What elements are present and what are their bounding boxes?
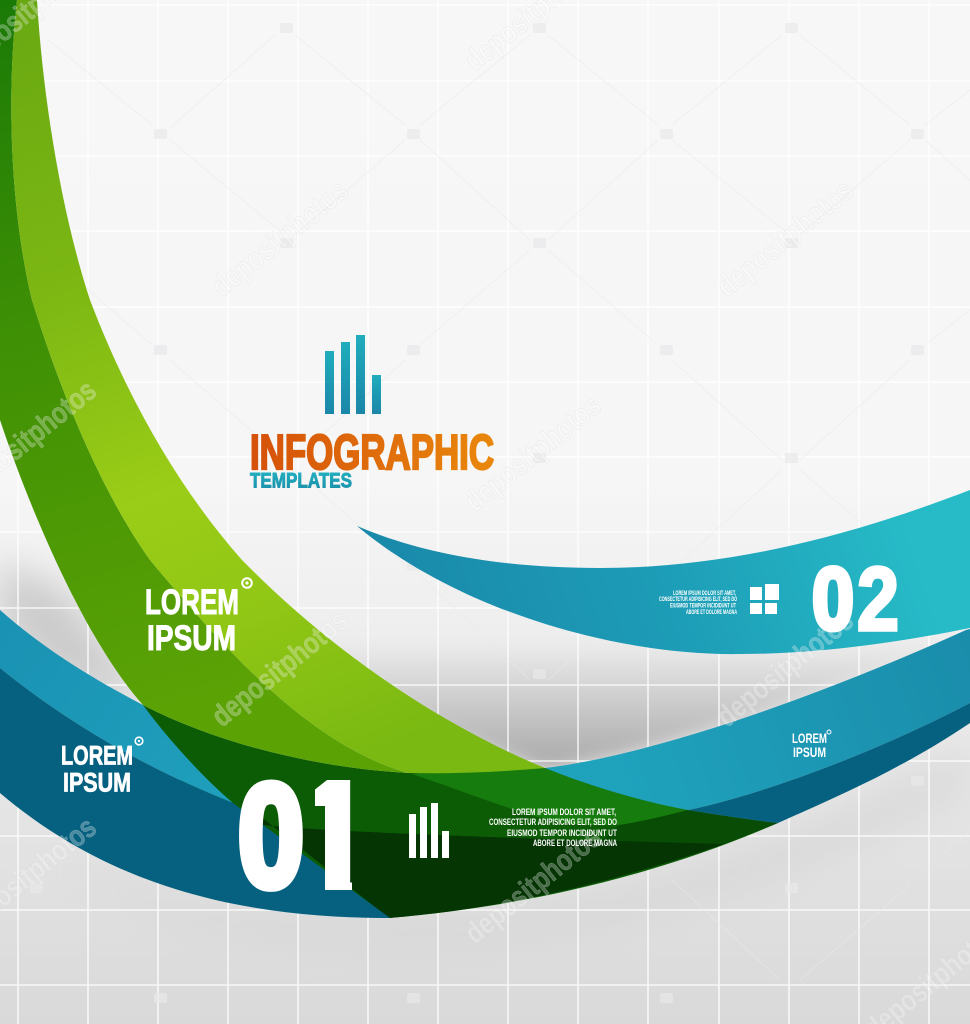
label: small lorem ipsum on teal band xyxy=(792,730,831,760)
label: lorem ipsum on green band: IPSUM xyxy=(147,619,236,658)
title: infographic templates: TEMPLATES xyxy=(250,470,352,492)
watermark: repeated stock-photo marks: depositphotos xyxy=(206,174,355,303)
text block: paragraph 01: ABORE ET DOLORE MAGNA xyxy=(533,838,617,849)
band: dark green base xyxy=(140,705,778,918)
band: left light teal xyxy=(0,610,233,803)
number: 01: 0 xyxy=(238,754,304,917)
label: small lorem ipsum on teal band: LOREM xyxy=(792,730,827,746)
label: lorem ipsum on green band: LOREM xyxy=(145,583,239,622)
band: lower right teal xyxy=(545,629,970,810)
watermark: repeated stock-photo marks: depositphotos xyxy=(711,604,860,733)
watermark: repeated stock-photo marks: depositphotos xyxy=(206,604,355,733)
label: lorem ipsum on blue band: IPSUM xyxy=(63,768,131,798)
band: mid green xyxy=(0,0,408,773)
number: 01: 1 xyxy=(294,746,374,942)
text block: paragraph 01: EIUSMOD TEMPOR INCIDIDUNT UT xyxy=(507,828,617,839)
band: upper teal ribbon xyxy=(357,490,970,654)
text block: paragraph 02: EIUSMOD TEMPOR INCIDIDUNT UT xyxy=(670,604,736,610)
icon: white bar chart xyxy=(409,803,449,858)
band: darkest green xyxy=(240,800,724,918)
text block: paragraph 01: LOREM IPSUM DOLOR SIT AMET, xyxy=(512,807,616,818)
band: bright green xyxy=(11,0,545,773)
band: left dark blue xyxy=(0,668,390,918)
icon: teal bar chart xyxy=(325,335,381,414)
watermark: repeated stock-photo marks: depositphotos xyxy=(459,389,608,518)
text block: paragraph 01: CONSECTETUR ADIPISICING ELIT, SED DO xyxy=(489,817,617,828)
watermark: repeated stock-photo marks: depositphotos xyxy=(711,174,860,303)
title: infographic templates: INFOGRAPHIC xyxy=(250,426,494,480)
text block: paragraph 02: LOREM IPSUM DOLOR SIT AMET, xyxy=(673,591,736,597)
text block: paragraph 02: CONSECTETUR ADIPISICING ELIT, SED DO xyxy=(659,597,737,603)
label: lorem ipsum on blue band xyxy=(61,737,143,798)
number: 02 xyxy=(812,549,899,650)
number: 02: 2 xyxy=(857,550,899,650)
text block: paragraph 02: ABORE ET DOLORE MAGNA xyxy=(686,610,737,616)
number: 01 xyxy=(239,780,352,892)
label: lorem ipsum on blue band: LOREM xyxy=(61,740,133,770)
text block: paragraph 02 xyxy=(659,591,737,616)
icon: four squares xyxy=(750,584,779,614)
text block: paragraph 01 xyxy=(489,807,617,849)
number: 02: 0 xyxy=(812,549,854,648)
label: small lorem ipsum on teal band: IPSUM xyxy=(793,744,826,760)
band: lower right dark blue xyxy=(688,703,970,823)
watermark: repeated stock-photo marks: depositphotos xyxy=(459,821,608,950)
band: green strip xyxy=(412,768,688,825)
title: infographic templates xyxy=(250,426,494,492)
label: lorem ipsum on green band xyxy=(145,578,252,658)
band: dark green right wedge xyxy=(600,810,778,844)
